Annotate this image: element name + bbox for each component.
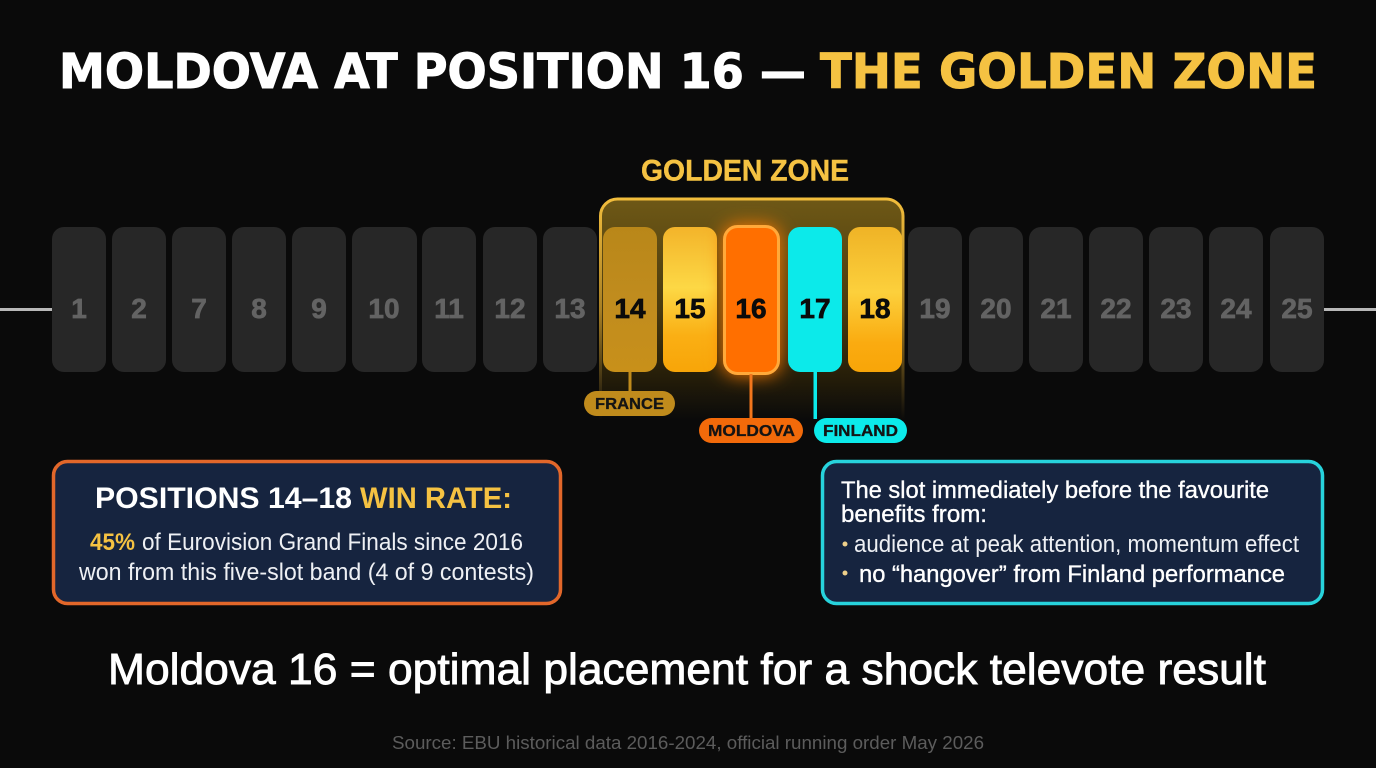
panel intro text: benefits from: (841, 501, 987, 528)
golden zone heading: GOLDEN ZONE (641, 154, 849, 188)
panel: win rate (54, 462, 560, 604)
running order slots before the zone: 12 (494, 293, 526, 324)
slot 14 France (603, 227, 657, 372)
callout: Moldova (699, 374, 803, 443)
panel body text (78, 529, 534, 586)
running order slots after the zone: 23 (1160, 293, 1192, 324)
slot 18: 18 (859, 293, 891, 324)
callout: Finland (814, 372, 907, 443)
running order slots before the zone: 8 (251, 293, 267, 324)
bullet: no hangover: no “hangover” from Finland performance (859, 561, 1285, 588)
timeline rail (0, 308, 1376, 311)
running order slots before the zone: 11 (434, 293, 464, 324)
running order slots after the zone: 21 (1040, 293, 1072, 324)
golden zone highlight band (600, 199, 903, 420)
slot 15 (663, 227, 717, 372)
running order slots before the zone: 9 (311, 293, 327, 324)
panel body text: won from this five-slot band (4 of 9 contests) (78, 559, 534, 586)
callout: France: FRANCE (595, 396, 664, 413)
slot 16 Moldova (723, 225, 780, 375)
running order slots after the zone (908, 227, 1324, 372)
title: MOLDOVA AT POSITION 16 — (59, 44, 806, 100)
callout: Moldova: MOLDOVA (708, 423, 795, 440)
callout: Finland: FINLAND (823, 423, 898, 440)
callout: France (584, 372, 675, 416)
panel heading: POSITIONS 14–18 (95, 482, 352, 515)
running order slots before the zone: 7 (191, 293, 207, 324)
source: Source: EBU historical data 2016-2024, official running order May 2026 (392, 732, 984, 753)
running order slots after the zone: 19 (919, 293, 951, 324)
title (59, 44, 1317, 100)
golden zone slots 14 to 18 (603, 225, 902, 375)
bullet: peak attention: audience at peak attention, momentum effect (854, 531, 1299, 558)
running order slots before the zone: 13 (554, 293, 586, 324)
running order slots before the zone: 1 (71, 293, 87, 324)
slot 18 (848, 227, 902, 372)
running order slots after the zone: 20 (980, 293, 1012, 324)
running order slots before the zone: 10 (368, 293, 400, 324)
conclusion: Moldova 16 = optimal placement for a shock televote result (108, 645, 1266, 694)
panel heading (95, 482, 512, 515)
panel intro text: The slot immediately before the favourite (841, 477, 1269, 504)
running order slots after the zone: 24 (1220, 293, 1252, 324)
running order slots after the zone: 22 (1100, 293, 1132, 324)
slot 17 Finland: 17 (799, 293, 831, 324)
running order slots before the zone: 2 (131, 293, 147, 324)
running order slots after the zone: 25 (1281, 293, 1313, 324)
slot 14 France: 14 (614, 293, 646, 324)
slot 15: 15 (674, 293, 706, 324)
slot 17 Finland (788, 227, 842, 372)
title: THE GOLDEN ZONE (820, 44, 1317, 100)
slot 16 Moldova: 16 (735, 293, 767, 324)
panel heading: WIN RATE: (360, 482, 512, 515)
running order slots before the zone (52, 227, 597, 372)
panel body text: 45% (90, 529, 135, 556)
panel: slot benefits (822, 462, 1322, 604)
panel body text: of Eurovision Grand Finals since 2016 (142, 529, 523, 556)
panel intro text (841, 477, 1269, 528)
